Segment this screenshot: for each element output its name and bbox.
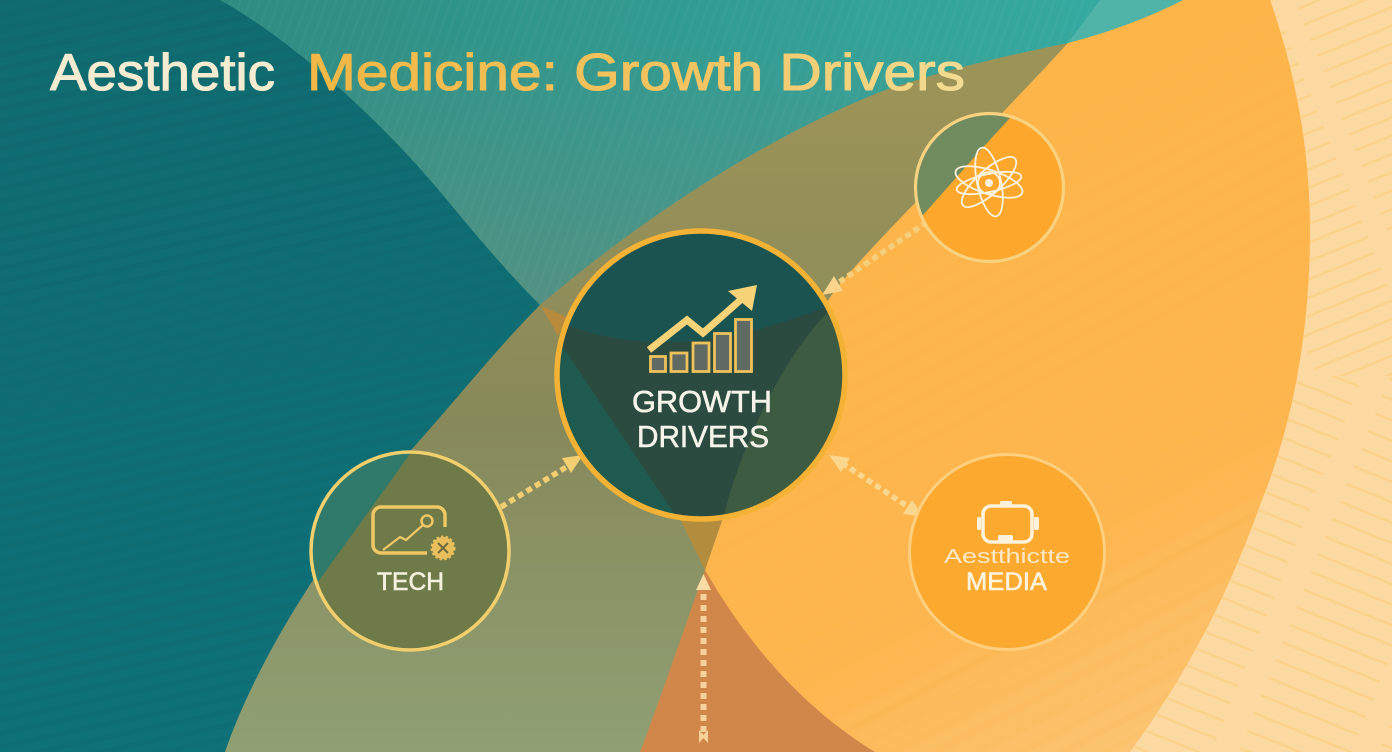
arrow: atom to hub [822, 222, 927, 295]
tech disc [312, 454, 508, 648]
background: olive overlap region [225, 43, 1068, 752]
hub label: DRIVERS [637, 419, 769, 454]
media label: MEDIA [966, 568, 1047, 596]
brown overlap triangle: upper left of hub [541, 306, 567, 336]
hub label [632, 384, 772, 454]
arrow: hub to media, two-way [829, 455, 924, 517]
central hub: growth drivers [555, 229, 850, 522]
hub disc [555, 229, 850, 522]
tech label: TECH [377, 568, 444, 596]
background: terracotta wedge [640, 570, 900, 752]
hub ring [557, 231, 845, 519]
background: pale peach outer band [1130, 0, 1392, 752]
media disc [910, 454, 1104, 650]
node: tech [300, 440, 510, 652]
media caption: Aestthictte [944, 546, 1070, 568]
arrow: bottom wedge up to hub [696, 574, 711, 743]
background: orange main region [705, 0, 1310, 752]
title [50, 44, 965, 102]
node: media [910, 454, 1104, 650]
node: atom [914, 112, 1066, 264]
background: light teal top band [220, 0, 1392, 305]
atom disc [917, 115, 1062, 260]
title word: Aesthetic: Aesthetic [50, 44, 275, 102]
brown overlap triangle: below hub [678, 515, 724, 570]
title words: Medicine: Growth Drivers: Medicine: Growth Drivers [307, 44, 965, 102]
icon: headset screen [977, 501, 1039, 542]
icon: rising bar chart with arrow [649, 285, 757, 372]
icon: screen with trend line and badge [373, 507, 454, 559]
icon: atom [952, 145, 1026, 219]
arrow: tech to hub [501, 455, 583, 507]
hub label: GROWTH [632, 384, 772, 419]
